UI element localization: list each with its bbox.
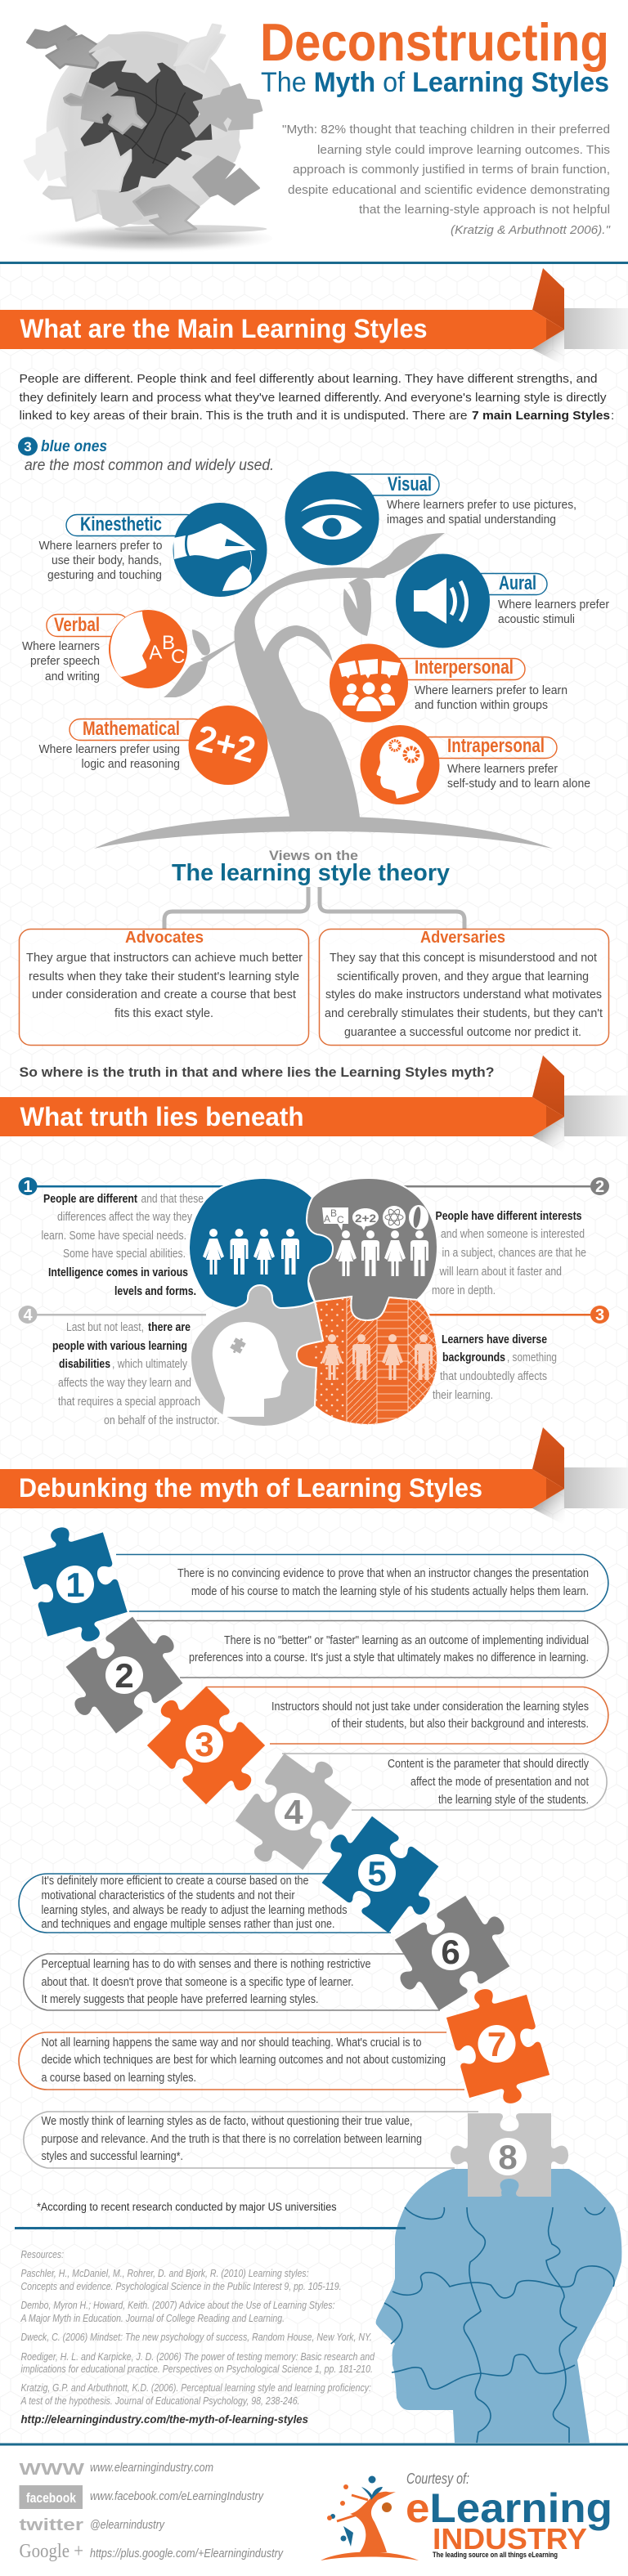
icon: speech bubbles: 2+2: [355, 1212, 376, 1225]
text block 1: People are different: [43, 1193, 137, 1206]
myth pill 5: motivational characteristics of the students and not their: [41, 1889, 295, 1902]
puzzle piece 3: 3: [195, 1725, 214, 1763]
icon: logo tree: [321, 2475, 419, 2560]
myth pill 1: [116, 1555, 608, 1611]
text block 3: their learning.: [433, 1389, 493, 1402]
question text: So where is the truth in that and where lies the Learning Styles myth?: [20, 1064, 494, 1080]
resources: A test of the hypothesis. Journal of Educational Psychology, 98, 238-246.: [20, 2395, 299, 2407]
item: aural: Aural: [499, 572, 536, 594]
myth pill 8: styles and successful learning*.: [41, 2150, 183, 2163]
logo: eLearning Industry: The leading source on all things eLearning: [433, 2551, 558, 2559]
icon: speech bubbles: C: [337, 1214, 344, 1225]
panel: advocates: under consideration and create a course that best: [32, 988, 296, 1001]
panel: advocates: They argue that instructors can achieve much better: [26, 952, 303, 965]
myth pill 6: It merely suggests that people have preferred learning styles.: [41, 1993, 319, 2006]
puzzle piece 4: [225, 1740, 362, 1884]
panel: advocates: fits this exact style.: [114, 1007, 213, 1020]
item: mathematical: Mathematical: [83, 718, 180, 740]
panel: advocates: [20, 929, 309, 1045]
divider: header rule: [0, 262, 628, 264]
myth pill 7: a course based on learning styles.: [41, 2072, 196, 2085]
item: aural: acoustic stimuli: [498, 613, 575, 626]
puzzle piece 1: 1: [65, 1566, 85, 1604]
myth pill 2: [137, 1620, 608, 1678]
panel: adversaries: They say that this concept is misunderstood and not: [330, 952, 597, 965]
blue ones note: blue ones: [41, 438, 107, 455]
myth pill 6: [24, 1954, 440, 2010]
item: kinesthetic: Kinesthetic: [80, 513, 162, 535]
icon: group with speech bubbles: [339, 659, 401, 711]
text block 4: [52, 1321, 219, 1427]
myth pill 3: of their students, but also their background and interests.: [331, 1718, 589, 1731]
item: mathematical: [39, 706, 268, 785]
item: kinesthetic: gesturing and touching: [47, 569, 162, 582]
puzzle piece 1: [18, 1516, 132, 1653]
icon: speaking head: A: [148, 641, 163, 665]
text block 4: people with various learning: [52, 1340, 187, 1353]
connector lines and number badges: 3: [595, 1306, 604, 1324]
item: interpersonal: and function within groups: [415, 699, 548, 712]
icon: speaking head: [110, 612, 185, 677]
text block 1: and that these: [141, 1193, 204, 1206]
puzzle piece 4: 4: [284, 1793, 303, 1831]
social links: https://plus.google.com/+Elearningindustry: [90, 2547, 284, 2560]
connector lines and number badges: [18, 1177, 609, 1324]
text block 4: that requires a special approach: [58, 1396, 200, 1409]
puzzle piece 6: 6: [441, 1933, 460, 1971]
text block 2: in a subject, chances are that he: [442, 1247, 586, 1260]
myth quote: that the learning-style approach is not helpful: [359, 204, 610, 217]
puzzle piece 6: [380, 1887, 524, 2019]
connector lines and number badges: 2: [595, 1178, 604, 1196]
icon: speech bubbles: A: [324, 1213, 330, 1225]
social links: @elearnindustry: [90, 2518, 165, 2532]
item: interpersonal: Interpersonal: [415, 656, 514, 679]
illustration: puzzle globe: [0, 25, 272, 253]
puzzle piece 3: [135, 1674, 277, 1817]
item: intrapersonal: Intrapersonal: [447, 735, 545, 757]
text block 4: , which ultimately: [112, 1358, 188, 1371]
blue ones note: [18, 437, 274, 474]
icon: speech bubbles: [322, 1205, 428, 1230]
social links: twitter: [20, 2516, 83, 2534]
banner: what are the main learning styles: [0, 268, 628, 366]
divider: resources rule: [15, 2227, 406, 2229]
icon: speaker: [414, 578, 466, 624]
text block 1: learn. Some have special needs.: [41, 1230, 186, 1243]
myth pill 4: [282, 1754, 607, 1810]
resources: Kratzig, G.P. and Arbuthnott, K.D. (2006). Perceptual learning style and learning proficiency:: [21, 2381, 371, 2394]
puzzle piece 2: [52, 1606, 196, 1744]
resources: Dweck, C. (2006) Mindset: The new psychology of success, Random House, New York, NY.: [21, 2331, 372, 2343]
piece: orange patterned: [297, 1292, 441, 1431]
piece: light gray head: [191, 1285, 323, 1427]
panel: adversaries: Adversaries: [420, 929, 505, 947]
connectors: [164, 887, 464, 929]
myth pill 6: about that. It doesn't prove that someone is a specific type of learner.: [41, 1976, 353, 1989]
icon: eye: [301, 500, 362, 540]
intro paragraph: they definitely learn and process what they've learned differently. And everyone's learning style is directly: [20, 391, 607, 405]
puzzle quadrant graphic: [189, 1178, 441, 1431]
text block 2: [432, 1210, 586, 1297]
banner: what truth lies beneath: [0, 1055, 628, 1154]
text block 4: affects the way they learn and: [58, 1377, 191, 1390]
myth pill 7: [19, 2032, 464, 2090]
resources: Paschler, H., McDaniel, M., Rohrer, D. and Bjork, R. (2010) Learning styles:: [21, 2267, 309, 2279]
blue ones note: are the most common and widely used.: [25, 457, 274, 474]
item: mathematical: 2+2: [193, 718, 259, 771]
myth pill 8: We mostly think of learning styles as de facto, without questioning their true value,: [41, 2115, 412, 2128]
logo: eLearning Industry: Courtesy of:: [406, 2471, 469, 2487]
banner: what truth lies beneath: What truth lies beneath: [20, 1102, 304, 1131]
heading: views on the learning style theory: The learning style theory: [172, 860, 450, 886]
text block 3: that undoubtedly affects: [440, 1370, 547, 1383]
social links: www.elearningindustry.com: [90, 2461, 213, 2475]
puzzle piece 5: 5: [367, 1854, 387, 1893]
panel: adversaries: and cerebrally stimulates their students, but they can't: [325, 1007, 603, 1020]
resources: Dembo, Myron H.; Howard, Keith. (2007) Advice about the Use of Learning Styles:: [21, 2299, 335, 2311]
tree illustration: [94, 533, 553, 849]
logo: eLearning Industry: eLearning: [406, 2485, 612, 2531]
myth quote: learning style could improve learning outcomes. This: [317, 144, 610, 157]
divider: footer rule: [0, 2443, 628, 2446]
intro paragraph: [20, 372, 614, 423]
icon: head with gears: [377, 737, 424, 799]
item: intrapersonal: Where learners prefer: [447, 763, 558, 776]
text block 3: [433, 1333, 557, 1402]
myth pill 5: learning styles, and always be ready to adjust the learning methods: [41, 1904, 347, 1917]
myth quote: "Myth: 82% thought that teaching children in their preferred: [282, 123, 610, 137]
myth pill 4: Content is the parameter that should directly: [388, 1758, 590, 1771]
panel: advocates: results when they take their student's learning style: [29, 970, 299, 983]
icon: speech bubbles: B: [330, 1207, 337, 1219]
icon: speaking head: B: [162, 632, 175, 654]
myth pill 4: the learning style of the students.: [438, 1794, 589, 1807]
intro paragraph: 7 main Learning Styles: [472, 409, 610, 423]
panel: adversaries: guarantee a successful outcome nor predict it.: [344, 1026, 581, 1039]
item: aural: Where learners prefer: [498, 598, 609, 612]
text block 4: disabilities: [59, 1358, 110, 1371]
myth pill 8: [24, 2112, 478, 2168]
item: kinesthetic: use their body, hands,: [52, 554, 162, 567]
resources: [20, 2248, 375, 2426]
resources: http://elearningindustry.com/the-myth-of-learning-styles: [21, 2412, 308, 2426]
text block 2: more in depth.: [432, 1284, 496, 1297]
panel: adversaries: scientifically proven, and they argue that learning: [337, 970, 589, 983]
intro paragraph: linked to key areas of their brain. This is the truth and it is undisputed. There are: [20, 409, 468, 423]
myth pill 5: It's definitely more efficient to create a course based on the: [41, 1875, 309, 1888]
item: visual: images and spatial understanding: [387, 513, 556, 526]
text block 1: Some have special abilities.: [63, 1248, 186, 1261]
item: visual: Visual: [388, 473, 432, 495]
item: mathematical: logic and reasoning: [82, 758, 180, 771]
puzzle piece 2: 2: [114, 1656, 134, 1695]
text block 4: on behalf of the instructor.: [104, 1414, 219, 1427]
heading: views on the learning style theory: [172, 848, 450, 886]
banner: debunking the myth: [0, 1427, 628, 1525]
icon: speaking head: C: [171, 646, 185, 668]
myth pill 8: purpose and relevance. And the truth is that there is no correlation between learning: [41, 2133, 422, 2146]
myth pill 3: Instructors should not just take under consideration the learning styles: [271, 1700, 589, 1714]
item: interpersonal: Where learners prefer to learn: [415, 684, 567, 697]
item: verbal: Verbal: [54, 614, 100, 636]
social links: WWW: [20, 2461, 84, 2479]
myth pill 6: Perceptual learning has to do with senses and there is nothing restrictive: [41, 1958, 371, 1971]
footnote: *According to recent research conducted by major US universities: [37, 2201, 337, 2213]
item: visual: [285, 471, 576, 566]
puzzle piece 8: 8: [498, 2138, 518, 2176]
myth quote: (Kratzig & Arbuthnott 2006).": [451, 224, 611, 237]
logo: eLearning Industry: INDUSTRY: [433, 2522, 587, 2556]
puzzle piece 7: 7: [487, 2025, 506, 2063]
panel: advocates: Advocates: [125, 929, 204, 947]
text block 1: differences affect the way they: [57, 1211, 193, 1224]
item: kinesthetic: Where learners prefer to: [39, 540, 162, 553]
item: verbal: Where learners: [22, 640, 100, 653]
item: interpersonal: [330, 644, 567, 723]
item: intrapersonal: self-study and to learn alone: [447, 777, 590, 791]
puzzle piece 5: [308, 1806, 452, 1943]
resources: A Major Myth in Education. Journal of College Reading and Learning.: [20, 2312, 285, 2324]
item: mathematical: Where learners prefer using: [39, 743, 180, 756]
connector lines and number badges: 4: [23, 1306, 33, 1324]
banner: what are the main learning styles: What are the Main Learning Styles: [20, 314, 427, 343]
text block 1: levels and forms.: [114, 1285, 196, 1298]
item: verbal: and writing: [45, 670, 100, 683]
text block 4: there are: [148, 1321, 191, 1334]
myth quote: despite educational and scientific evidence demonstrating: [288, 184, 610, 197]
item: kinesthetic: [39, 503, 267, 597]
myth quote: [282, 123, 611, 237]
resources: implications for educational practice. Perspectives on Psychological Science 1, pp. 181-210.: [21, 2363, 373, 2375]
text block 1: Intelligence comes in various: [48, 1266, 188, 1279]
intro paragraph: People are different. People think and feel differently about learning. They have different strengths, and: [20, 372, 597, 386]
text block 4: Last but not least,: [66, 1321, 144, 1334]
title: [260, 12, 609, 98]
myth quote: approach is commonly justified in terms of brain function,: [293, 164, 610, 177]
puzzle piece 7: [442, 1978, 554, 2114]
title: The Myth of Learning Styles: [261, 67, 609, 98]
text block 3: backgrounds: [442, 1351, 505, 1364]
banner: debunking the myth: Debunking the myth of Learning Styles: [19, 1473, 482, 1503]
blue ones note: 3: [24, 439, 32, 455]
connector lines and number badges: 1: [23, 1178, 33, 1196]
text block 3: , something: [507, 1351, 557, 1364]
item: intrapersonal: [360, 725, 590, 804]
resources: Concepts and evidence. Psychological Science in the Public Interest 9, pp. 105-119.: [21, 2280, 342, 2292]
item: verbal: [22, 610, 186, 688]
social links: www.facebook.com/eLearningIndustry: [90, 2489, 264, 2503]
social links: [20, 2461, 284, 2562]
item: aural: [396, 554, 609, 647]
head with puzzle lines: [376, 2169, 621, 2443]
icon: hand: [173, 523, 256, 591]
text block 2: and when someone is interested: [441, 1228, 585, 1241]
heading: views on the learning style theory: Views on the: [269, 848, 358, 863]
social links: Google +: [20, 2541, 83, 2562]
social links: facebook: [26, 2490, 76, 2506]
item: visual: Where learners prefer to use pictures,: [387, 499, 576, 512]
logo: eLearning Industry: [321, 2471, 612, 2560]
piece: blue people: [189, 1178, 333, 1308]
piece: gray interests: [307, 1178, 437, 1320]
myth pill 7: Not all learning happens the same way and nor should teaching. What's crucial is to: [41, 2036, 422, 2050]
text block 2: People have different interests: [435, 1210, 582, 1223]
text block 1: [41, 1193, 204, 1298]
myth pill 5: and techniques and engage multiple senses rather than just one.: [41, 1918, 335, 1931]
myth pill 3: [206, 1687, 608, 1744]
panel: adversaries: styles do make instructors understand what motivates: [325, 988, 602, 1001]
item: verbal: prefer speech: [30, 655, 100, 668]
text block 3: Learners have diverse: [442, 1333, 547, 1346]
panel: adversaries: [319, 929, 608, 1045]
resources: Roediger, H. L. and Karpicke, J. D. (2006) The power of testing memory: Basic research and: [21, 2350, 375, 2363]
resources: Resources:: [21, 2248, 64, 2260]
text block 2: will learn about it faster and: [439, 1266, 562, 1279]
puzzle piece 8: [451, 2113, 568, 2207]
intro paragraph: :: [611, 409, 614, 423]
myth pill 7: decide which techniques are best for which learning outcomes and not about customizing: [41, 2054, 446, 2067]
myth pill 4: affect the mode of presentation and not: [410, 1776, 589, 1789]
myth pill 5: [19, 1874, 391, 1933]
